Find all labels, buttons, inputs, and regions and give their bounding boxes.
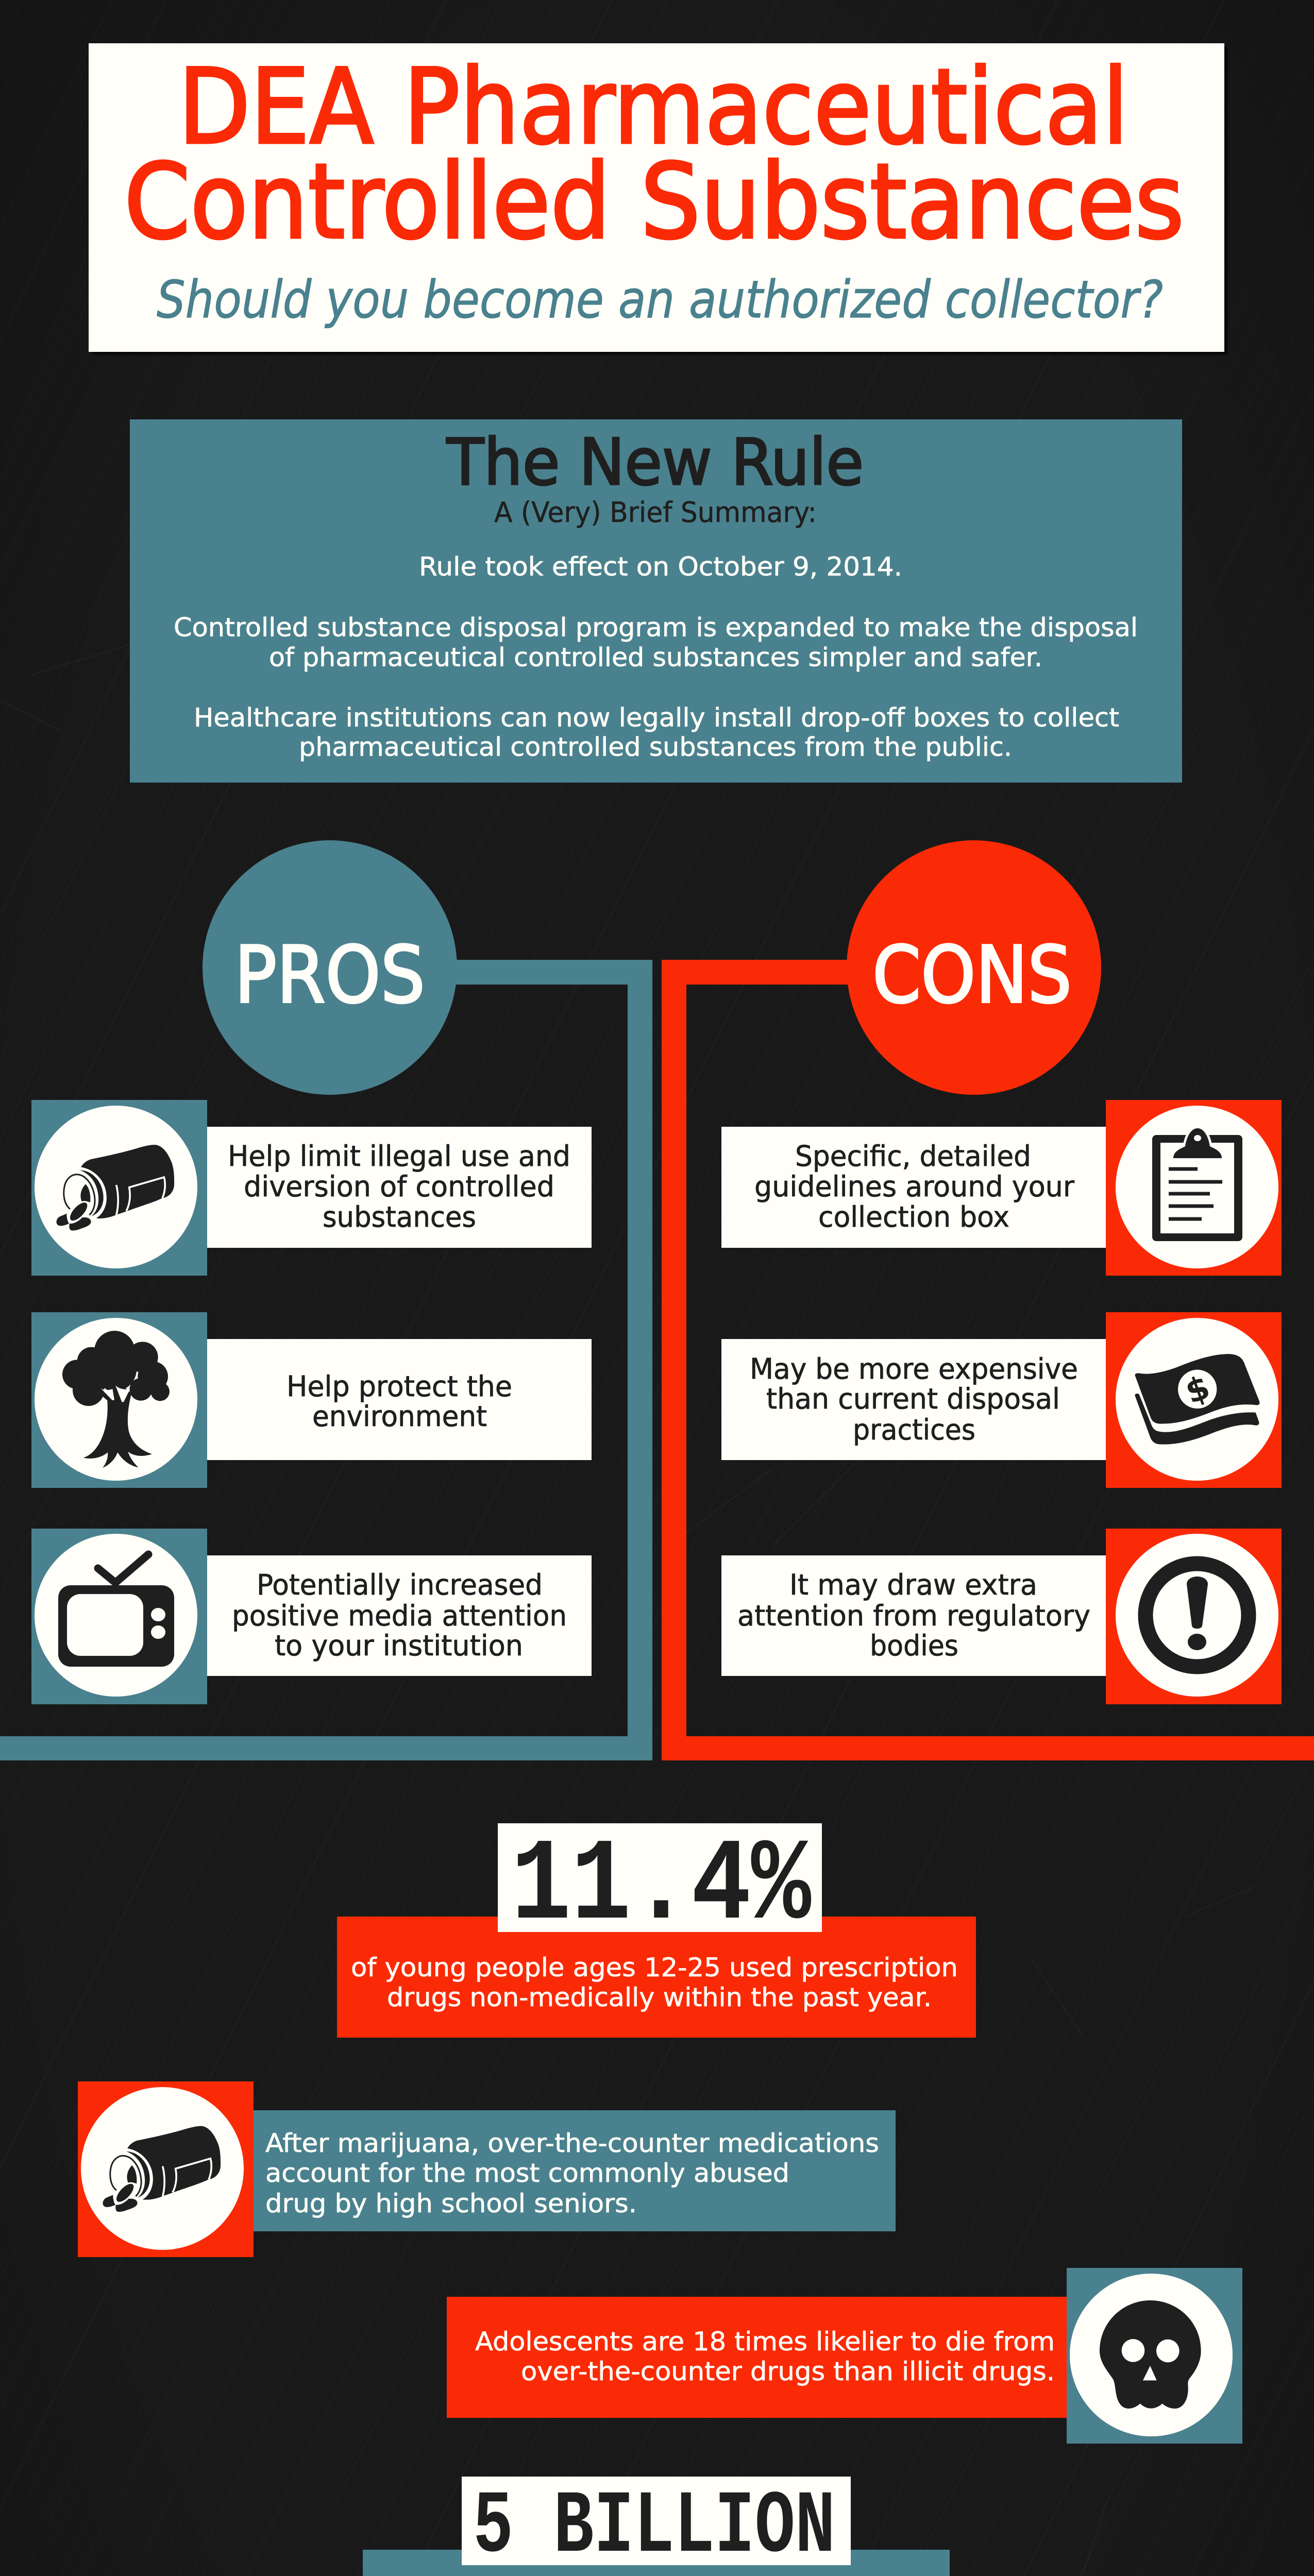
con 1: text: Specific, detailed: [795, 1140, 1031, 1173]
rule paragraph 2: [194, 703, 1119, 762]
subheading: brief summary: A (Very) Brief Summary:: [494, 496, 817, 529]
pro 2: text: environment: [312, 1400, 487, 1433]
callout text: over-the-counter drugs than illicit drugs.: [521, 2357, 1055, 2386]
stat description: of young people ages 12-25 used prescription: [351, 1953, 958, 1982]
cons heading circle: [847, 840, 1101, 1095]
icon: tree: [31, 1312, 207, 1488]
rule date: Rule took effect on October 9, 2014.: [419, 552, 902, 582]
callout text: [265, 2128, 879, 2218]
heading: the new rule: The New Rule: [446, 426, 864, 500]
con 2: text: than current disposal: [766, 1382, 1060, 1415]
rule paragraph 1: [174, 613, 1138, 672]
icon: money: [1106, 1312, 1282, 1488]
callout text: After marijuana, over-the-counter medications: [265, 2128, 879, 2158]
callout: adolescents: [447, 2268, 1242, 2444]
pro 3: text: [207, 1555, 592, 1676]
con 3: text: bodies: [870, 1629, 958, 1662]
stat description: [351, 1953, 958, 2012]
pro 1: text: [207, 1127, 592, 1248]
icon: money: $: [1181, 1368, 1215, 1411]
rule paragraph 1: Controlled substance disposal program is expanded to make the disposal: [174, 613, 1138, 642]
subtitle: Should you become an authorized collector?: [157, 269, 1163, 330]
callout text: account for the most commonly abused: [265, 2158, 789, 2188]
panel: cons: [662, 840, 1314, 1760]
stat description: drugs non-medically within the past year.: [387, 1982, 932, 2012]
rule paragraph 1: of pharmaceutical controlled substances simpler and safer.: [269, 642, 1042, 672]
rule paragraph 2: pharmaceutical controlled substances from the public.: [299, 732, 1012, 762]
callout: over-the-counter medications: [78, 2081, 896, 2257]
con 1: text: [721, 1127, 1106, 1248]
pros connector: [0, 960, 652, 1760]
pro 1: text: substances: [323, 1200, 476, 1233]
callout text: Adolescents are 18 times likelier to die from: [475, 2327, 1055, 2357]
pro 3: text: to your institution: [275, 1629, 523, 1662]
pro 3: text: positive media attention: [232, 1599, 567, 1632]
stat number: 11.4%: [511, 1821, 811, 1953]
stat number: 5 BILLION: [473, 2477, 835, 2576]
callout text: [475, 2327, 1055, 2386]
pro 3: text: Potentially increased: [257, 1568, 543, 1601]
rule paragraph 2: Healthcare institutions can now legally install drop-off boxes to collect: [194, 703, 1119, 733]
pro 2: text: [207, 1339, 592, 1460]
pro 1: text: Help limit illegal use and: [228, 1140, 570, 1173]
cons connector: [662, 960, 1314, 1760]
icon: exclamation: [1106, 1529, 1282, 1704]
title line 2: Controlled Substances: [124, 142, 1184, 262]
con 1: text: collection box: [818, 1200, 1009, 1233]
con 3: text: [721, 1555, 1106, 1676]
con 2: text: May be more expensive: [750, 1352, 1078, 1385]
icon: television: [31, 1529, 207, 1704]
title panel: [89, 43, 1228, 356]
icon: clipboard: [1106, 1100, 1282, 1276]
cons heading circle: CONS: [872, 929, 1072, 1021]
panel: the new rule: [130, 419, 1182, 783]
con 2: text: practices: [853, 1413, 975, 1446]
icon: pill bottle: [31, 1100, 207, 1276]
icon: pill bottle on red: [78, 2081, 254, 2257]
pro 2: text: Help protect the: [287, 1370, 512, 1403]
title line 1: DEA Pharmaceutical: [178, 47, 1128, 167]
con 2: text: [721, 1339, 1106, 1460]
con 3: text: attention from regulatory: [737, 1599, 1090, 1632]
con 3: text: It may draw extra: [789, 1568, 1037, 1601]
con 1: text: guidelines around your: [754, 1170, 1074, 1203]
pro 1: text: diversion of controlled: [244, 1170, 554, 1203]
icon: skull: [1067, 2268, 1242, 2444]
panel: pros: [0, 840, 652, 1760]
callout text: drug by high school seniors.: [265, 2189, 637, 2218]
stat: 5 billion: [363, 2477, 950, 2576]
pros heading circle: PROS: [234, 929, 425, 1021]
stat: 11.4 percent: [337, 1821, 976, 2038]
pros heading circle: [203, 840, 457, 1095]
